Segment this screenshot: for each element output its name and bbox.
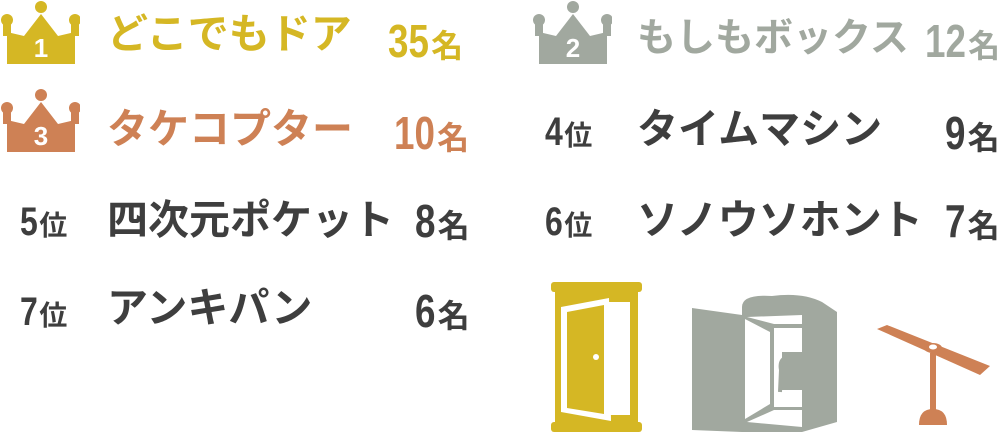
- rank 6: 位: [564, 204, 592, 244]
- crown 2: 2: [566, 33, 580, 63]
- rank 2 count: 12: [925, 15, 966, 67]
- text: 名: [968, 201, 999, 247]
- rank 5: 位: [39, 204, 67, 244]
- crown 2: [533, 1, 612, 64]
- rank 1 count: 35: [388, 15, 429, 67]
- crown 1: [1, 1, 80, 64]
- crown 3: [1, 89, 80, 152]
- icon: booth: [692, 294, 837, 432]
- rank 3 count: 10: [394, 107, 435, 159]
- rank 2 name: もしもボックス: [637, 17, 909, 60]
- rank 3 name: タケコプター: [107, 106, 353, 152]
- rank 1 count: 名: [431, 21, 463, 67]
- text: 7: [945, 195, 965, 247]
- text: 8: [415, 195, 435, 247]
- crown 3: 3: [34, 121, 48, 151]
- text: 名: [438, 291, 470, 337]
- icon: propeller: [877, 325, 990, 425]
- rank 7: 位: [39, 294, 67, 334]
- rank 6: 6: [545, 200, 563, 244]
- text: 6: [415, 285, 435, 337]
- rank 4: 4: [545, 110, 563, 154]
- icon: door: [551, 282, 642, 432]
- rank 7: 7: [20, 290, 38, 334]
- text: 名: [438, 201, 470, 247]
- rank 2 count: [925, 15, 999, 67]
- rank 5: 5: [20, 200, 38, 244]
- crown 1: 1: [34, 33, 48, 63]
- text: タイムマシン: [637, 106, 882, 152]
- rank 1 count: [388, 15, 463, 67]
- rank 1 name: どこでもドア: [107, 11, 352, 57]
- rank 6: [545, 200, 592, 244]
- rank 4: [545, 110, 592, 154]
- text: アンキパン: [107, 285, 312, 331]
- rank 4: 位: [564, 114, 592, 154]
- rank 5: [20, 200, 67, 244]
- text: 9: [945, 107, 965, 159]
- text: 名: [968, 113, 999, 159]
- rank 3 count: [394, 107, 469, 159]
- rank 7: [20, 290, 67, 334]
- rank 3 count: 名: [437, 113, 469, 159]
- text: 四次元ポケット: [107, 197, 394, 243]
- text: ソノウソホント: [637, 197, 923, 243]
